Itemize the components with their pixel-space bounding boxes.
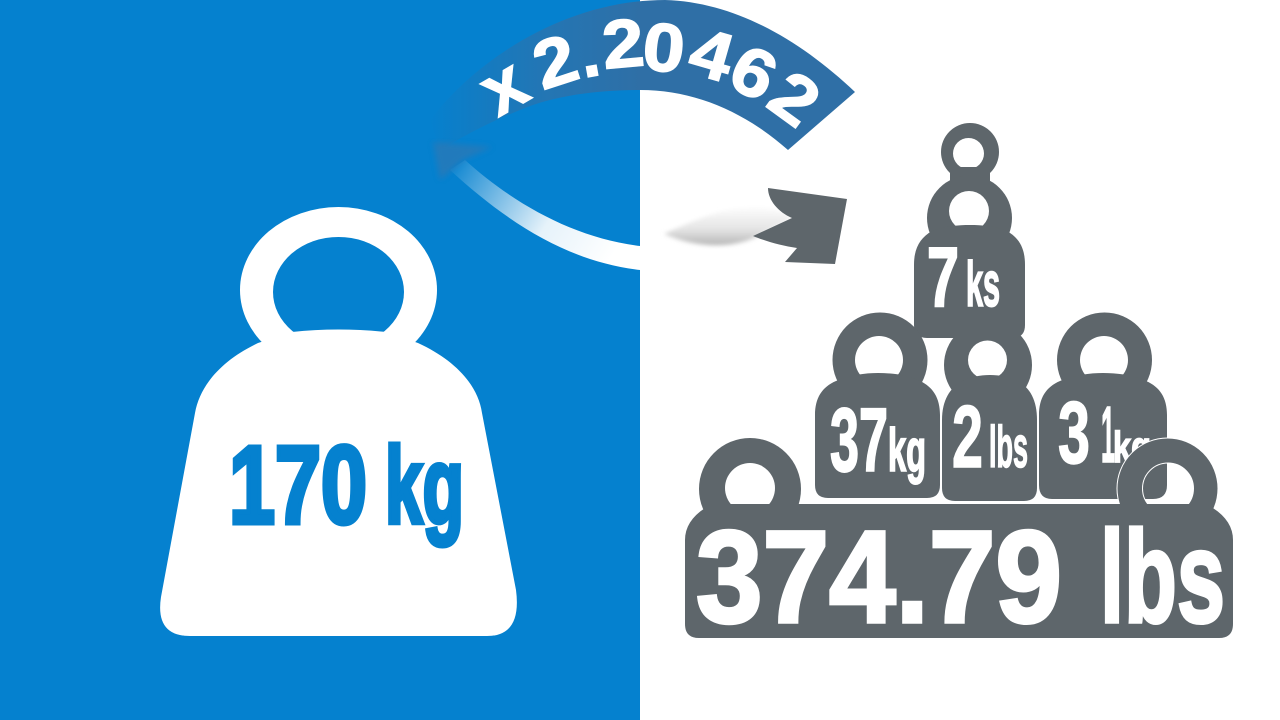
banner text: x 2.20462: 6 xyxy=(718,30,789,116)
banner text: x 2.20462: 2 xyxy=(524,19,587,105)
weight: right 3 kg xyxy=(1039,312,1167,499)
weight: right 3 kg: 3 xyxy=(1058,383,1090,482)
weight: center 2 lbs xyxy=(942,321,1037,501)
weight: bottom 374.79 lbs: 374.79 xyxy=(696,503,1062,650)
weight: center 2 lbs: 2 xyxy=(952,387,983,486)
weight: left 37 kg xyxy=(815,312,940,498)
weight: top 7 ks xyxy=(914,123,1025,338)
weight: top 7 ks: 7 xyxy=(927,230,959,324)
banner: conversion factor arc xyxy=(430,0,855,150)
arrow: grey arrowhead with shadow pointing to the right weights xyxy=(664,188,847,264)
arrow: white curved arrow pointing to the left weight xyxy=(433,142,640,270)
label: 170 kg: kg xyxy=(385,425,464,547)
panel: blue left background xyxy=(0,0,640,720)
banner text: x 2.20462: x xyxy=(466,42,541,131)
weight: right 3 kg: kg xyxy=(1113,423,1151,472)
weight: bottom 374.79 lbs xyxy=(685,438,1233,650)
banner text: x 2.20462: . xyxy=(573,14,605,92)
weight: top 7 ks: ks xyxy=(966,250,1000,320)
banner text: x 2.20462: 0 xyxy=(639,8,689,88)
weight: center 2 lbs: lbs xyxy=(989,415,1028,480)
weight: right 3 kg: 1 xyxy=(1101,390,1115,479)
weight: left 37 kg: 37 xyxy=(830,391,888,491)
banner text: x 2.20462 xyxy=(466,4,834,142)
label: 170 kg: 170 xyxy=(229,424,367,547)
panel: white right background xyxy=(640,0,1280,720)
banner text: x 2.20462: 4 xyxy=(681,13,742,98)
icon: large white weight 170 kg xyxy=(160,207,517,636)
banner text: x 2.20462: 2 xyxy=(599,4,647,84)
stack of grey weights xyxy=(685,123,1233,650)
weight: left 37 kg: kg xyxy=(888,417,926,484)
banner text: x 2.20462: 2 xyxy=(755,56,834,142)
